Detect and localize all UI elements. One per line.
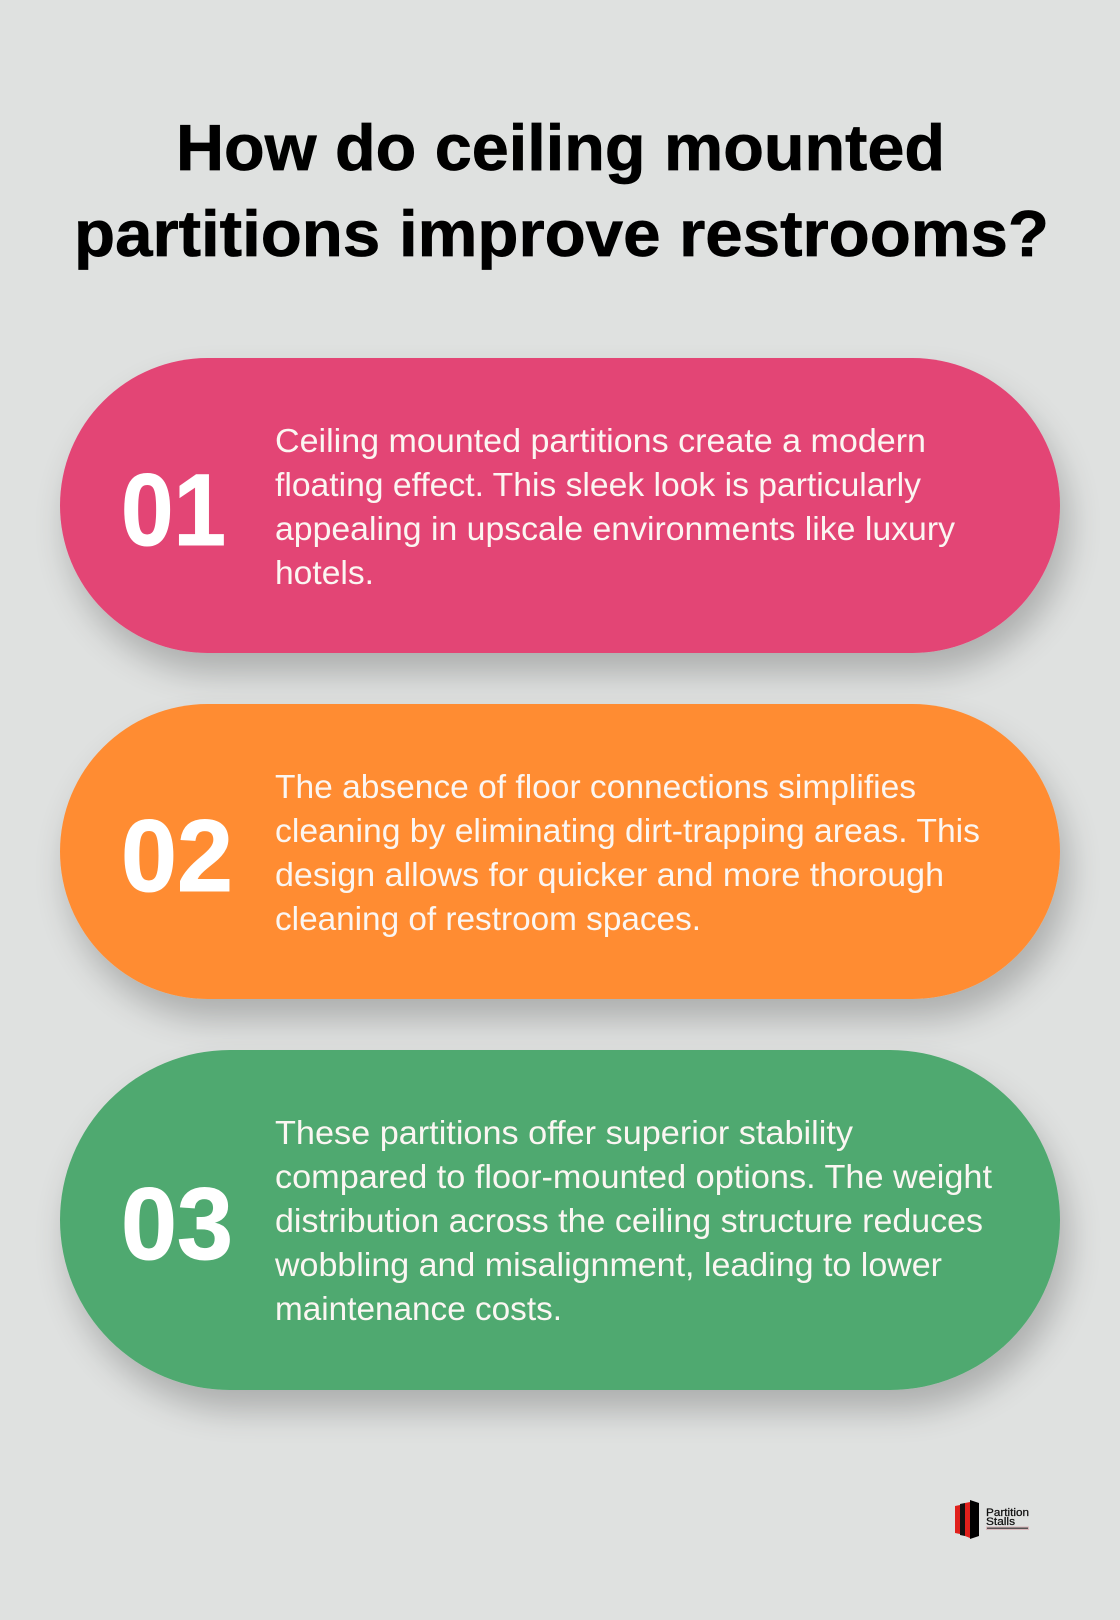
pink pill background xyxy=(60,358,1060,653)
text block 03: These partitions offer superior stability xyxy=(275,1114,854,1151)
text block 03: compared to floor-mounted options. The weight xyxy=(275,1158,992,1195)
icon: partition panels xyxy=(955,1500,979,1539)
text block 01 xyxy=(275,422,956,591)
text block 01: floating effect. This sleek look is particularly xyxy=(275,466,922,503)
text block 03: distribution across the ceiling structure reduces xyxy=(275,1202,983,1239)
text block 02: cleaning of restroom spaces. xyxy=(275,900,701,937)
text block 02: design allows for quicker and more thorough xyxy=(275,856,944,893)
text block 02 xyxy=(275,768,980,937)
text block 02: cleaning by eliminating dirt-trapping areas. This xyxy=(275,812,980,849)
text block 03: wobbling and misalignment, leading to lower xyxy=(274,1246,942,1283)
title: partitions improve restrooms? xyxy=(74,198,1049,270)
text block 01: hotels. xyxy=(275,554,374,591)
panel: card 02 xyxy=(60,704,1060,999)
green pill background xyxy=(60,1050,1060,1390)
logo: Partition Stalls xyxy=(955,1500,1029,1539)
logo wordmark: Partition xyxy=(986,1507,1029,1519)
text block 03: maintenance costs. xyxy=(275,1290,562,1327)
logo tagline xyxy=(986,1526,1029,1530)
title xyxy=(74,112,1049,270)
logo: Partition Stalls: Stalls xyxy=(986,1516,1016,1528)
text block 01: appealing in upscale environments like luxury xyxy=(275,510,956,547)
panel: card 01 xyxy=(60,358,1060,653)
number 03: 03 xyxy=(121,1167,233,1281)
orange pill background xyxy=(60,704,1060,999)
panel: card 03 xyxy=(60,1050,1060,1390)
text block 02: The absence of floor connections simplifies xyxy=(275,768,916,805)
text block 01: Ceiling mounted partitions create a modern xyxy=(275,422,926,459)
number 02: 02 xyxy=(121,799,233,913)
text block 03 xyxy=(274,1114,992,1327)
number 01: 01 xyxy=(121,453,226,567)
title: How do ceiling mounted xyxy=(176,112,945,184)
